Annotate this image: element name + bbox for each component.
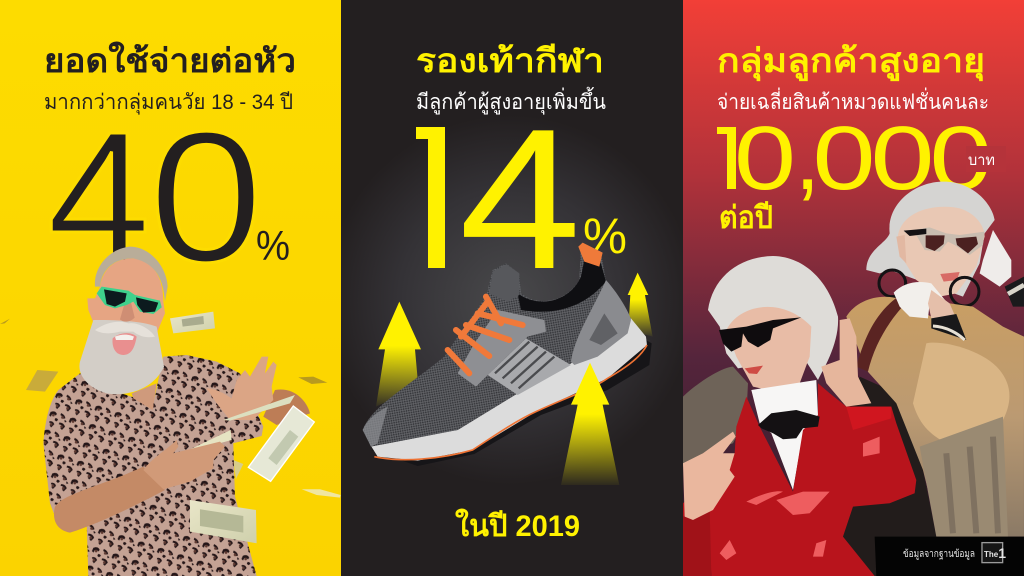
big number 10,000: 0 xyxy=(930,109,992,209)
forearm xyxy=(54,467,165,533)
logo box xyxy=(982,543,1003,563)
heading: sports shoes: รองเท้ากีฬา xyxy=(416,42,604,79)
sunglasses xyxy=(903,227,985,255)
held bill xyxy=(223,395,295,421)
hand on shoulder xyxy=(821,318,871,407)
eyelet panel xyxy=(458,310,546,387)
arm back xyxy=(263,389,310,425)
lips xyxy=(940,272,960,282)
arrow middle xyxy=(561,363,619,485)
upper hand xyxy=(207,357,277,420)
woman right xyxy=(840,182,1024,576)
percent sign: % xyxy=(256,222,290,269)
cage stripes xyxy=(488,338,571,395)
hand on fur xyxy=(683,432,736,520)
shirt xyxy=(43,355,263,576)
collar xyxy=(518,260,606,312)
hair xyxy=(866,182,995,297)
white shirt xyxy=(751,380,818,490)
big number 10,000: 0 xyxy=(870,109,934,209)
logo text: The xyxy=(984,550,998,559)
flying bills xyxy=(0,312,341,498)
green sunglasses xyxy=(97,287,162,314)
midsole xyxy=(369,318,647,461)
big number 10,000 xyxy=(717,126,987,200)
big white bill xyxy=(248,406,314,481)
outsole xyxy=(371,340,652,466)
dark coat xyxy=(840,377,936,576)
mouth xyxy=(112,333,137,355)
red jacket xyxy=(683,383,916,576)
head xyxy=(87,258,165,333)
necklace xyxy=(758,410,820,439)
bottom bill xyxy=(190,500,257,543)
footnote: in 2019: ในปี 2019 xyxy=(455,508,580,543)
lips xyxy=(745,366,763,374)
unit: baht xyxy=(966,146,1006,172)
big number 14 xyxy=(416,127,575,268)
subheading: more older customers: มีลูกค้าผู้สูงอายุเพิ่มขึ้น xyxy=(416,87,606,115)
photo illustration: man throwing money xyxy=(0,247,341,576)
panel: spending per head (yellow) xyxy=(0,0,341,576)
beard xyxy=(79,320,164,394)
subheading: more than 18-34 group: มากกว่ากลุ่มคนวัย 18 - 34 ปี xyxy=(44,91,293,115)
face xyxy=(726,307,811,393)
heel tab xyxy=(578,243,603,267)
stack of bills xyxy=(183,430,232,453)
hair xyxy=(708,256,838,380)
sunglasses xyxy=(719,317,801,352)
heading: spend per head: ยอดใช้จ่ายต่อหัว xyxy=(44,41,296,79)
fur coat xyxy=(846,297,1024,537)
woman left xyxy=(683,256,916,576)
hair xyxy=(95,247,168,302)
big number 14: 4 xyxy=(459,88,581,311)
heading: older customer group: กลุ่มลูกค้าสูงอายุ xyxy=(717,42,985,82)
heel cap xyxy=(571,280,631,365)
face xyxy=(898,207,985,297)
logo text: 1 xyxy=(998,545,1006,561)
glove at neck xyxy=(894,282,946,318)
percent sign: % xyxy=(583,208,627,264)
neck xyxy=(132,383,157,410)
gloved hand up xyxy=(980,230,1011,287)
big number 40 xyxy=(47,94,263,301)
arrow left xyxy=(376,302,421,407)
nose xyxy=(120,298,135,322)
big number 10,000: 0 xyxy=(812,109,876,209)
big number 40: 4 xyxy=(47,94,150,301)
subheading: average fashion spend: จ่ายเฉลี่ยสินค้าหมวดแฟชั่นคนละ xyxy=(717,87,989,114)
panel: older customers fashion spend (red) xyxy=(683,0,1024,576)
upper mesh xyxy=(363,243,631,447)
unit: baht: บาท xyxy=(968,152,995,169)
lower hand xyxy=(143,440,225,489)
fur collar left xyxy=(683,367,748,467)
source bar xyxy=(875,537,1024,576)
panel: sports shoes (dark) xyxy=(341,0,683,576)
bag strap xyxy=(856,293,907,372)
big number 14: 1 xyxy=(380,88,491,311)
big number 40: 0 xyxy=(149,94,263,301)
arrow right xyxy=(628,273,653,337)
toe highlight xyxy=(363,407,388,447)
cuff xyxy=(931,314,966,340)
big number 10,000: , xyxy=(795,109,820,209)
source text: ข้อมูลจากฐานข้อมูล xyxy=(903,548,975,560)
per year: ต่อปี xyxy=(719,200,773,235)
shoe xyxy=(363,243,652,466)
big number 10,000: 0 xyxy=(734,109,796,209)
big number 10,000: 1 xyxy=(705,109,755,209)
orange laces xyxy=(448,297,523,373)
earrings xyxy=(879,270,906,297)
